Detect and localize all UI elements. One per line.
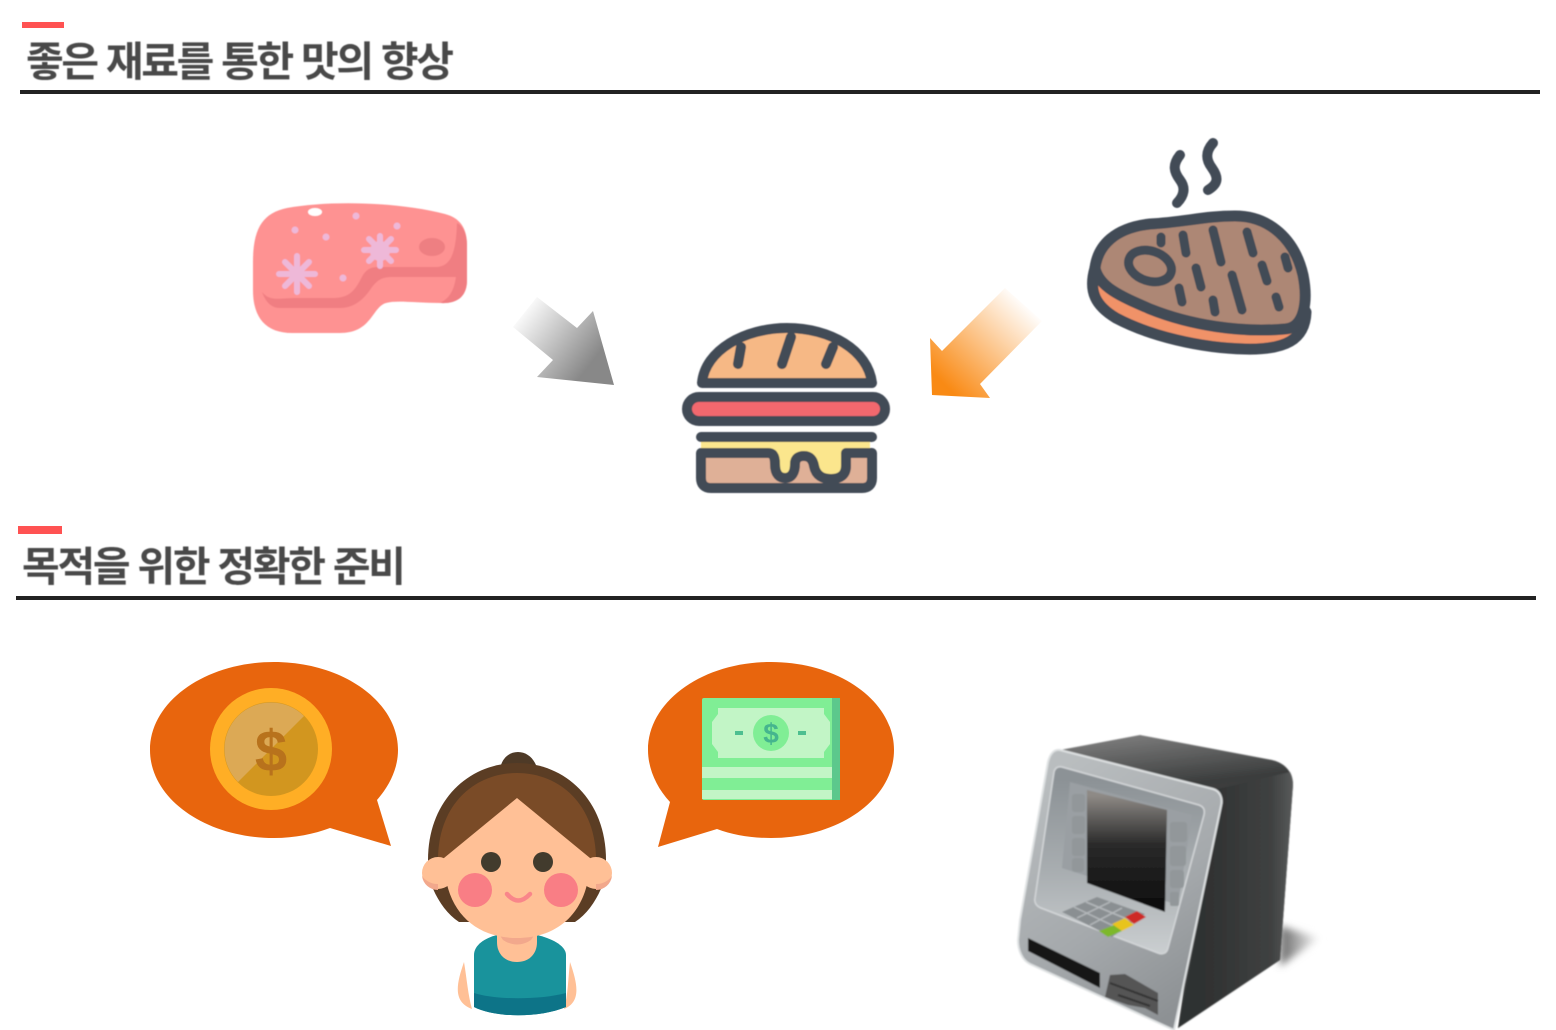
icon: raw marbled meat [253, 203, 467, 333]
character: girl with hair bun [422, 752, 612, 1015]
accent bar [22, 22, 64, 28]
icon: banknotes [702, 698, 840, 800]
icon: ATM machine [1018, 735, 1320, 1030]
icon: burger [687, 328, 885, 488]
heading: 목적을 위한 정확한 준비 [22, 544, 406, 590]
heading rule [20, 90, 1540, 94]
icon: coin [210, 688, 332, 810]
arrow: orange pointing to burger [930, 288, 1042, 398]
arrow: gray pointing to burger [513, 297, 614, 385]
section: better taste through good ingredients [20, 22, 1540, 488]
heading: 좋은 재료를 통한 맛의 향상 [26, 39, 454, 85]
speech bubble: coin [150, 662, 398, 846]
section: accurate preparation for the purpose [16, 526, 1536, 1030]
icon: banknotes: $ [763, 718, 779, 749]
icon: coin: $ [255, 719, 287, 784]
icon: grilled steak [1093, 143, 1306, 349]
heading rule [16, 596, 1536, 600]
speech bubble: banknotes [648, 662, 894, 847]
accent bar [18, 526, 62, 534]
